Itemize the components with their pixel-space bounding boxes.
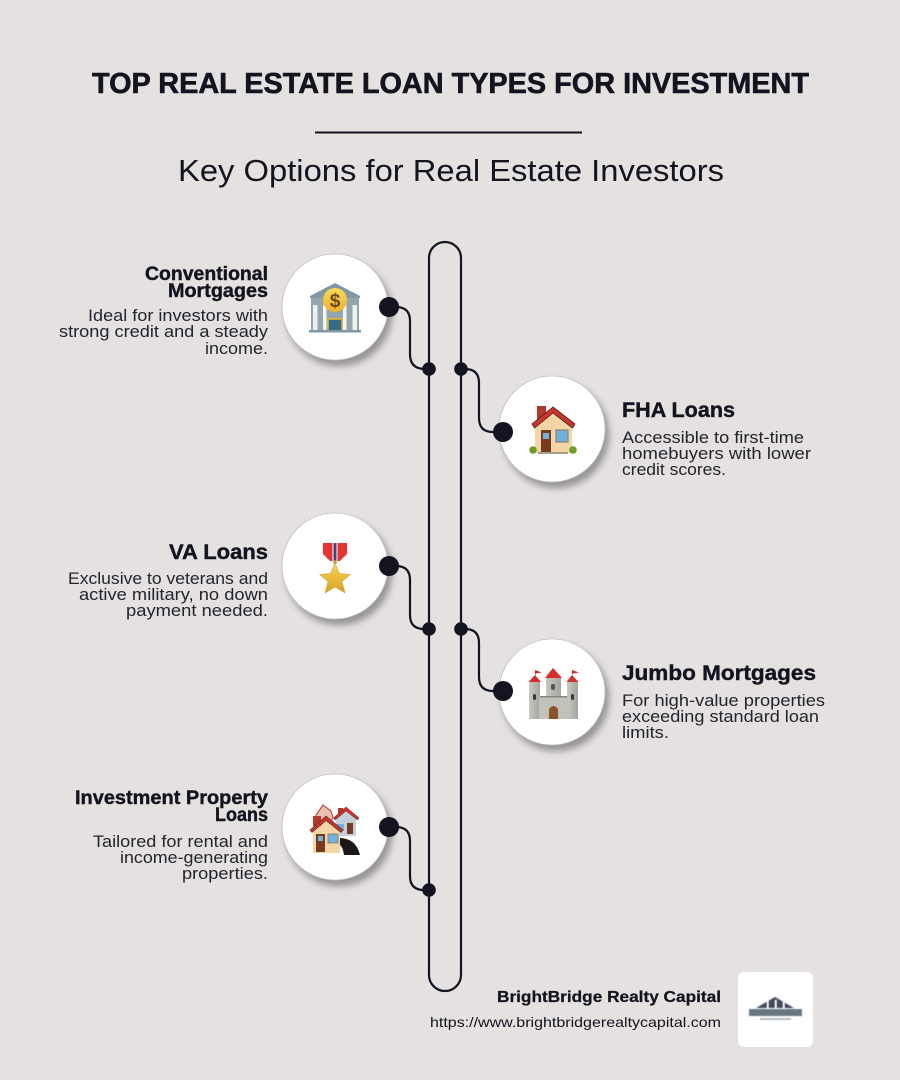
text: conventional [59,264,269,358]
text: conventional: strong credit and a steady [59,323,269,341]
connector: investment [389,827,429,890]
text: conventional: Mortgages [168,281,268,302]
text: investment: Loans [215,805,268,826]
circle: VA [282,513,388,619]
footer brand name: BrightBridge Realty Capital [497,989,721,1006]
panel: conventional mortgages [59,254,436,376]
connector: jumbo [461,629,503,691]
circle: jumbo [499,639,605,745]
text: VA: active military, no down [79,586,268,604]
icon: house [529,406,577,454]
text: conventional: Conventional [145,264,268,285]
junction: investment [422,883,436,897]
text: conventional: income. [205,340,268,358]
panel: investment property loans [75,774,436,897]
central timeline loop [429,242,461,991]
circle: investment [282,774,388,880]
circle: conventional [282,254,388,360]
icon: bank with dollar coin: $ [330,291,341,312]
panel: VA loans [68,513,436,636]
text: VA: VA Loans [169,541,268,564]
text: jumbo: limits. [622,724,669,742]
circle: FHA [499,376,605,482]
footer url: https://www.brightbridgerealtycapital.com [430,1014,721,1030]
marker: conventional [379,297,399,317]
text: conventional: Ideal for investors with [88,307,268,325]
text: VA [68,541,268,620]
text: investment: income-generating [120,849,268,867]
text: jumbo [622,662,825,742]
marker: VA [379,556,399,576]
text: investment: Investment Property [75,788,268,809]
text: VA: Exclusive to veterans and [68,570,268,588]
text: FHA: Accessible to first-time [622,429,804,447]
connector: VA [389,566,429,629]
title: TOP REAL ESTATE LOAN TYPES FOR INVESTMENT [92,68,810,100]
text: jumbo: For high-value properties [622,692,825,710]
junction: FHA [454,362,468,376]
marker: investment [379,817,399,837]
text: jumbo: exceeding standard loan [622,708,819,726]
text: FHA: homebuyers with lower [622,445,812,463]
panel: FHA loans [454,362,812,482]
panel: jumbo mortgages [454,622,825,745]
logo [738,972,813,1047]
subtitle: Key Options for Real Estate Investors [178,153,724,188]
marker: FHA [493,422,513,442]
junction: conventional [422,362,436,376]
junction: jumbo [454,622,468,636]
icon: houses [310,805,360,855]
text: investment: Tailored for rental and [93,833,268,851]
connector: FHA [461,369,503,432]
text: FHA [622,399,812,479]
connector: conventional [389,307,429,369]
icon: castle [528,668,579,719]
text: investment [75,788,268,883]
text: jumbo: Jumbo Mortgages [622,662,816,685]
icon: medal [320,543,350,593]
text: investment: properties. [182,865,268,883]
icon: bank with dollar coin [309,283,361,332]
text: FHA: credit scores. [622,461,726,479]
junction: VA [422,622,436,636]
text: VA: payment needed. [126,602,268,620]
text: FHA: FHA Loans [622,399,735,422]
marker: jumbo [493,681,513,701]
